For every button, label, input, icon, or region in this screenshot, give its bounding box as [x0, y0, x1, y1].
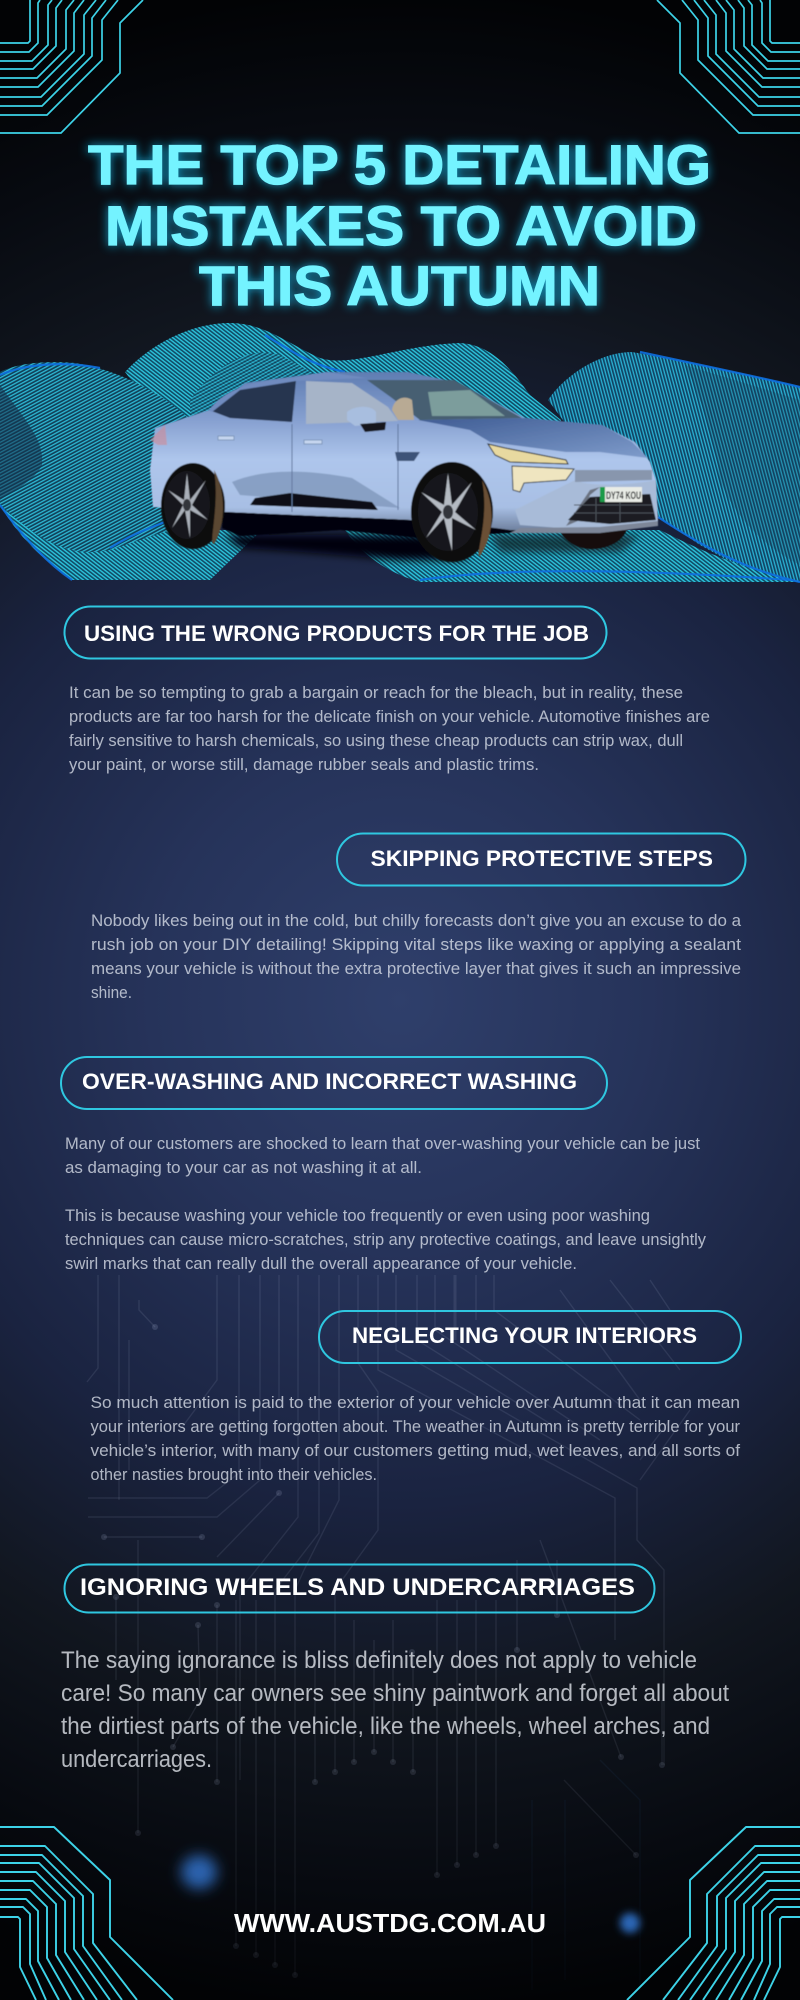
- paragraph 5: The saying ignorance is bliss definitely does not apply to vehicle: [61, 1647, 697, 1674]
- heading pill 1: USING THE WRONG PRODUCTS FOR THE JOB: [84, 621, 589, 646]
- far front wheel: [558, 526, 628, 549]
- paragraph 5: undercarriages.: [61, 1746, 212, 1773]
- paragraph 1: fairly sensitive to harsh chemicals, so using these cheap products can strip wax, dull: [69, 731, 683, 750]
- paragraph 5: [61, 1647, 729, 1773]
- paragraph 1: your paint, or worse still, damage rubber seals and plastic trims.: [69, 755, 539, 774]
- hood: [418, 418, 648, 458]
- title: MISTAKES TO AVOID: [105, 194, 697, 257]
- heading pill 2: [337, 834, 746, 886]
- glow spot: left: [181, 1855, 217, 1889]
- paragraph 3: [65, 1134, 706, 1273]
- title glow: [88, 133, 711, 317]
- bumper and grille: [515, 480, 658, 531]
- rear wheel: [161, 463, 225, 549]
- section 5: [61, 1564, 729, 1773]
- heading pill 4: NEGLECTING YOUR INTERIORS: [352, 1323, 697, 1348]
- glow spot: right: [620, 1913, 640, 1933]
- corner decoration: top right: [657, 0, 800, 133]
- paragraph 1: products are far too harsh for the delicate finish on your vehicle. Automotive finishes are: [69, 707, 710, 726]
- paragraph 2: means your vehicle is without the extra protective layer that gives it such an impressive: [91, 959, 741, 978]
- heading pill 2: SKIPPING PROTECTIVE STEPS: [370, 846, 713, 871]
- title: [88, 133, 711, 317]
- rear window: [209, 380, 296, 422]
- paragraph 4: vehicle’s interior, with many of our customers getting mud, wet leaves, and all sorts of: [90, 1441, 740, 1460]
- roof rail: [209, 372, 367, 412]
- underbody: [215, 505, 560, 538]
- title glow: THE TOP 5 DETAILING: [88, 133, 711, 196]
- heading pill 5: [64, 1564, 654, 1612]
- corner decoration: bottom left: [0, 1827, 173, 2000]
- heading pill 3: OVER-WASHING AND INCORRECT WASHING: [82, 1069, 577, 1094]
- heading pill 4: [319, 1311, 741, 1363]
- windshield: [367, 380, 522, 420]
- front wheel: [411, 462, 493, 562]
- paragraph 2: [91, 911, 742, 1002]
- paragraph 2: Nobody likes being out in the cold, but chilly forecasts don’t give you an excuse to do a: [91, 911, 742, 930]
- footer website: WWW.AUSTDG.COM.AU: [234, 1908, 546, 1938]
- heading pill 3: [61, 1057, 607, 1109]
- paragraph 2: rush job on your DIY detailing! Skipping vital steps like waxing or applying a sealant: [91, 935, 741, 954]
- illustration: car: [150, 372, 658, 562]
- charge port: [395, 452, 420, 461]
- paragraph 5: the dirtiest parts of the vehicle, like the wheels, wheel arches, and: [61, 1713, 710, 1740]
- title: THIS AUTUMN: [199, 254, 600, 317]
- section 1: [64, 606, 710, 774]
- paragraph 3: as damaging to your car as not washing it at all.: [65, 1158, 422, 1177]
- side window: [306, 381, 398, 424]
- number plate: DY74 KOU: [606, 490, 641, 502]
- heading pill 5: IGNORING WHEELS AND UNDERCARRIAGES: [80, 1574, 635, 1601]
- paragraph 3: Many of our customers are shocked to learn that over-washing your vehicle can be just: [65, 1134, 700, 1153]
- number plate: [600, 487, 642, 502]
- wave mesh graphic: [0, 323, 800, 582]
- wing mirror: [347, 407, 376, 426]
- section 4: [90, 1311, 741, 1484]
- paragraph 3: techniques can cause micro-scratches, strip any protective coatings, and leave unsightly: [65, 1230, 706, 1249]
- title: THE TOP 5 DETAILING: [88, 133, 711, 196]
- section 2: [91, 834, 746, 1002]
- paragraph 1: It can be so tempting to grab a bargain or reach for the bleach, but in reality, these: [69, 683, 683, 702]
- paragraph 5: care! So many car owners see shiny paintwork and forget all about: [61, 1680, 729, 1707]
- corner decoration: bottom right: [627, 1827, 800, 2000]
- paragraph 4: [90, 1393, 740, 1484]
- title glow: THIS AUTUMN: [199, 254, 600, 317]
- title glow: MISTAKES TO AVOID: [105, 194, 697, 257]
- heading pill 1: [64, 606, 606, 658]
- faint circuit board pattern: [87, 1275, 690, 1990]
- paragraph 3: This is because washing your vehicle too frequently or even using poor washing: [65, 1206, 650, 1225]
- paragraph 4: So much attention is paid to the exterior of your vehicle over Autumn that it can mean: [90, 1393, 740, 1412]
- section 3: [61, 1057, 706, 1273]
- car body: [150, 372, 658, 531]
- car shadow: [225, 535, 470, 560]
- paragraph 4: other nasties brought into their vehicles.: [90, 1465, 377, 1484]
- door handles: [218, 436, 322, 444]
- paragraph 3: swirl marks that can really dull the overall appearance of your vehicle.: [65, 1254, 577, 1273]
- corner decoration: top left: [0, 0, 143, 133]
- paragraph 1: [69, 683, 710, 774]
- headlights: [488, 444, 568, 464]
- paragraph 2: shine.: [91, 983, 132, 1002]
- door shading: [232, 472, 400, 508]
- paragraph 4: your interiors are getting forgotten about. The weather in Autumn is pretty terrible for your: [90, 1417, 740, 1436]
